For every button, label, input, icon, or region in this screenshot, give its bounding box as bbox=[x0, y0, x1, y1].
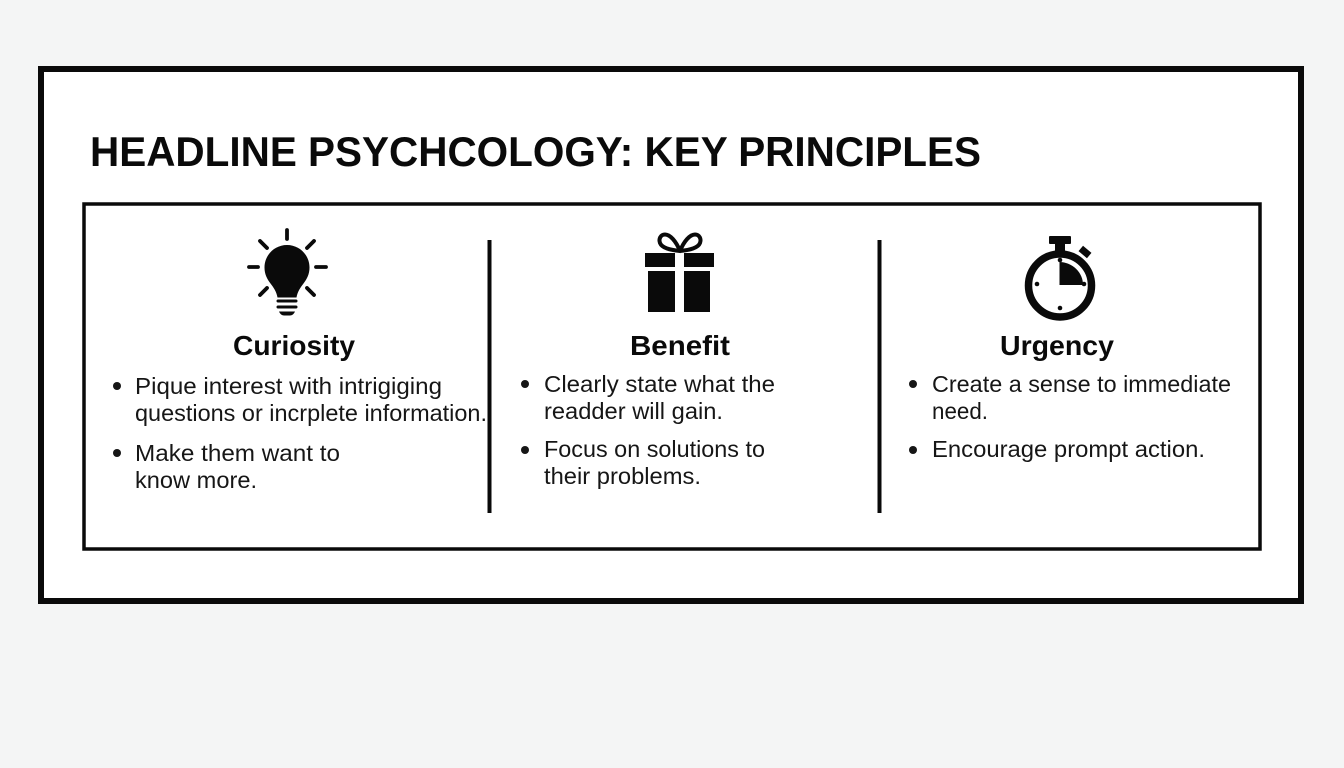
bullet list: urgency bbox=[909, 371, 1231, 462]
heading: benefit: Benefit bbox=[630, 330, 730, 361]
bullet list: benefit: Focus on solutions to bbox=[544, 436, 765, 462]
outer frame bbox=[41, 69, 1301, 601]
bullet list: benefit: Clearly state what the bbox=[544, 371, 775, 397]
bullet list: benefit: readder will gain. bbox=[544, 398, 723, 424]
bullet list: benefit: their problems. bbox=[544, 463, 701, 489]
bullet list: urgency: Create a sense to immediate bbox=[932, 371, 1231, 397]
icon: light bulb bbox=[249, 230, 326, 316]
icon: gift box bbox=[645, 234, 714, 312]
panel: benefit bbox=[521, 234, 775, 489]
divider: left bbox=[488, 240, 492, 513]
icon: stopwatch bbox=[1028, 236, 1092, 317]
inner panel bbox=[84, 204, 1260, 549]
bullet list: urgency: Encourage prompt action. bbox=[932, 436, 1205, 462]
bullet list: curiosity: know more. bbox=[135, 467, 257, 493]
bullet list: urgency: need. bbox=[932, 398, 988, 424]
bullet list: curiosity: questions or incrplete information. bbox=[135, 400, 487, 426]
title: HEADLINE PSYCHCOLOGY: KEY PRINCIPLES bbox=[90, 128, 981, 175]
bullet list: curiosity: Pique interest with intrigiging bbox=[135, 373, 442, 399]
heading: curiosity: Curiosity bbox=[233, 330, 355, 361]
bullet list: curiosity: Make them want to bbox=[135, 440, 340, 466]
bullet list: curiosity bbox=[113, 373, 487, 493]
heading: urgency: Urgency bbox=[1000, 330, 1114, 361]
divider: right bbox=[878, 240, 882, 513]
panel: curiosity bbox=[113, 230, 487, 493]
panel: urgency bbox=[909, 236, 1231, 462]
bullet list: benefit bbox=[521, 371, 775, 489]
